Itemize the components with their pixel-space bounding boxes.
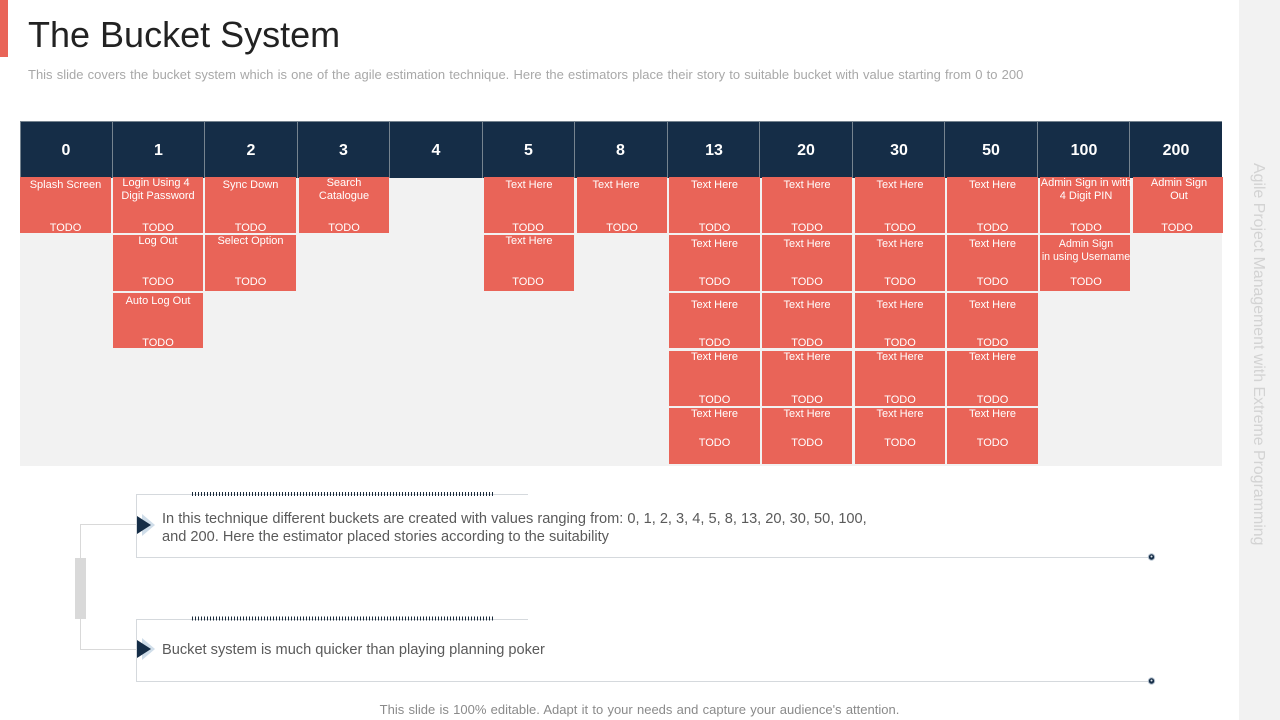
bucket board [20,121,1223,466]
card: Search Catalogue [299,177,389,233]
subtitle: This slide covers the bucket system which is one of the agile estimation technique. Here the estimators place their story to suitable bucket with value starting from 0 to 200 [28,67,1023,82]
card: Admin Sign Out: Out [1170,190,1188,202]
header 4: 4 [432,142,440,159]
card: bucket 13 row 5: TODO [699,437,730,449]
card: bucket 20 row 2: TODO [791,276,823,288]
header 5 [482,121,575,178]
board background [20,177,1222,466]
card: Admin Sign in with PIN: TODO [1070,222,1102,234]
callout 1 text: In this technique different buckets are created with values ranging from: 0, 1, 2, 3, 4, 5, 8, 13, 20, 30, 50, 100, [162,511,867,527]
callout 1 frame [136,492,1156,561]
card: Auto Log Out: Auto Log Out [126,295,190,307]
card: bucket 20 row 5: TODO [791,437,823,449]
card: bucket 30 row 1: TODO [884,222,916,234]
card: Admin Sign in using Username: Admin Sign [1059,238,1113,250]
card: bucket 50 row 5 [947,408,1038,464]
card: bucket 50 row 5: Text Here [969,408,1016,420]
callout 2 frame [136,616,1156,685]
card: Log Out: TODO [142,276,174,288]
card: bucket 8 row 1 [577,177,667,233]
callout 2 [136,616,1156,685]
card: bucket 30 row 1: Text Here [876,179,924,191]
card: Splash Screen: Splash Screen [30,179,101,191]
footer note: This slide is 100% editable. Adapt it to your needs and capture your audience's attention. [380,702,899,717]
card: Splash Screen [20,177,111,233]
card: bucket 20 row 4 [762,351,852,406]
header 3 [297,121,390,178]
card: bucket 13 row 1: TODO [699,222,730,234]
header 4 [389,121,482,178]
card: bucket 13 row 4: TODO [699,394,730,406]
card: bucket 8 row 1: Text Here [592,179,640,191]
card: bucket 13 row 1 [669,177,760,233]
header 13: 13 [705,142,723,159]
card: Auto Log Out [113,293,203,348]
card: Admin Sign in using Username: TODO [1070,276,1102,288]
card: bucket 13 row 2: TODO [699,276,730,288]
card: bucket 50 row 4: Text Here [969,351,1016,363]
card: Select Option [205,235,296,291]
header 100: 100 [1071,142,1097,159]
card: bucket 50 row 4: TODO [977,394,1008,406]
card: Login: Login Using 4 [122,177,190,189]
card: bucket 30 row 1 [855,177,945,233]
card: bucket 20 row 2: Text Here [783,238,831,250]
header 200 [1129,121,1222,178]
card: bucket 13 row 4 [669,351,760,406]
card: bucket 30 row 5: Text Here [876,408,924,420]
card: bucket 50 row 4 [947,351,1038,406]
card: bucket 30 row 2 [855,235,945,291]
card: Select Option: Select Option [217,235,284,247]
card: bucket 5 row 1: TODO [512,222,544,234]
header 100 [1037,121,1130,178]
card: Sync Down [205,177,296,233]
card: bucket 13 row 5 [669,408,760,464]
icon: arrow 1 [137,514,155,536]
callout 1 text: and 200. Here the estimator placed stories according to the suitability [162,529,609,545]
card: bucket 50 row 2: TODO [977,276,1008,288]
card: Admin Sign Out: Admin Sign [1151,177,1207,189]
card: Select Option: TODO [235,276,266,288]
card: bucket 50 row 3: Text Here [969,299,1016,311]
card: bucket 20 row 3: TODO [791,337,823,349]
card: bucket 20 row 1: TODO [791,222,823,234]
card: bucket 30 row 2: TODO [884,276,916,288]
card: bucket 20 row 4: TODO [791,394,823,406]
card: bucket 13 row 2 [669,235,760,291]
header 2 [204,121,297,178]
card: bucket 30 row 4: Text Here [876,351,924,363]
callout 2 text: Bucket system is much quicker than playing planning poker [162,642,545,658]
header 30 [852,121,945,178]
card: Admin Sign Out [1133,177,1223,233]
card: bucket 30 row 3: Text Here [876,299,924,311]
card: bucket 30 row 3: TODO [884,337,916,349]
card: Admin Sign in using Username: in using Username [1042,251,1130,263]
card: bucket 20 row 1 [762,177,852,233]
card: bucket 8 row 1: TODO [606,222,638,234]
header 8 [574,121,667,178]
card: bucket 13 row 5: Text Here [691,408,738,420]
card: Splash Screen: TODO [50,222,81,234]
callout 1 [136,492,1156,561]
card: bucket 20 row 2 [762,235,852,291]
header 13 [667,121,760,178]
card: Login: Digit Password [121,190,195,202]
card: bucket 20 row 3: Text Here [783,299,831,311]
card: Search Catalogue: Search [327,177,361,189]
card: bucket 30 row 5 [855,408,945,464]
header 30: 30 [890,142,908,159]
header 2: 2 [247,142,255,159]
card: bucket 30 row 3 [855,293,945,348]
card: bucket 20 row 5 [762,408,852,464]
card: bucket 13 row 3: TODO [699,337,730,349]
card: bucket 20 row 1: Text Here [783,179,831,191]
header 20 [759,121,852,178]
card: bucket 20 row 5: Text Here [783,408,831,420]
card: Admin Sign in using Username [1040,235,1130,291]
header 50 [944,121,1037,178]
card: bucket 30 row 4: TODO [884,394,916,406]
card: Sync Down: Sync Down [223,179,278,191]
callout 1 text [162,511,867,545]
header 1: 1 [154,142,163,159]
card: bucket 30 row 2: Text Here [876,238,924,250]
card: bucket 50 row 2: Text Here [969,238,1016,250]
card: bucket 50 row 5: TODO [977,437,1008,449]
card: bucket 50 row 2 [947,235,1038,291]
card: bucket 50 row 3: TODO [977,337,1008,349]
vertical label: Agile Project Management with Extreme Programming [1250,163,1267,545]
title accent bar [0,0,8,57]
title: The Bucket System [28,14,340,55]
header 8: 8 [616,142,625,159]
card: bucket 13 row 2: Text Here [691,238,738,250]
card: bucket 20 row 3 [762,293,852,348]
header 50: 50 [982,142,1000,159]
card: bucket 5 row 2: TODO [512,276,544,288]
header 0: 0 [62,142,70,159]
card: Log Out: Log Out [138,235,178,247]
side band with vertical label [1239,0,1280,720]
header 0 [20,121,112,178]
card: bucket 30 row 4 [855,351,945,406]
card: bucket 13 row 1: Text Here [691,179,738,191]
card: bucket 50 row 3 [947,293,1038,348]
card: bucket 5 row 2: Text Here [505,235,553,247]
card: Search Catalogue: Catalogue [319,190,369,202]
card: Log Out [113,235,203,291]
card: Admin Sign in with PIN [1040,177,1130,233]
card: bucket 50 row 1: TODO [977,222,1008,234]
card: Admin Sign in with PIN: Admin Sign in with [1041,177,1131,189]
header 200: 200 [1163,142,1189,159]
icon: arrow 2 [137,638,155,660]
header 1 [112,121,205,178]
card: bucket 50 row 1 [947,177,1038,233]
header 20: 20 [797,142,815,159]
card: Login: TODO [142,222,174,234]
card: bucket 50 row 1: Text Here [969,179,1016,191]
card: bucket 13 row 3 [669,293,760,348]
card: bucket 5 row 2 [484,235,574,291]
card: Sync Down: TODO [235,222,266,234]
header 3: 3 [339,142,348,159]
header 5: 5 [524,142,533,159]
card: bucket 13 row 4: Text Here [691,351,738,363]
card: Login [113,177,203,233]
card: bucket 5 row 1: Text Here [505,179,553,191]
card: Auto Log Out: TODO [142,337,174,349]
card: Admin Sign in with PIN: 4 Digit PIN [1060,190,1112,202]
card: bucket 5 row 1 [484,177,574,233]
card: Admin Sign Out: TODO [1161,222,1193,234]
card: bucket 30 row 5: TODO [884,437,916,449]
connector with grey handle [75,524,136,650]
card: Search Catalogue: TODO [328,222,360,234]
card: bucket 13 row 3: Text Here [691,299,738,311]
card: bucket 20 row 4: Text Here [783,351,831,363]
